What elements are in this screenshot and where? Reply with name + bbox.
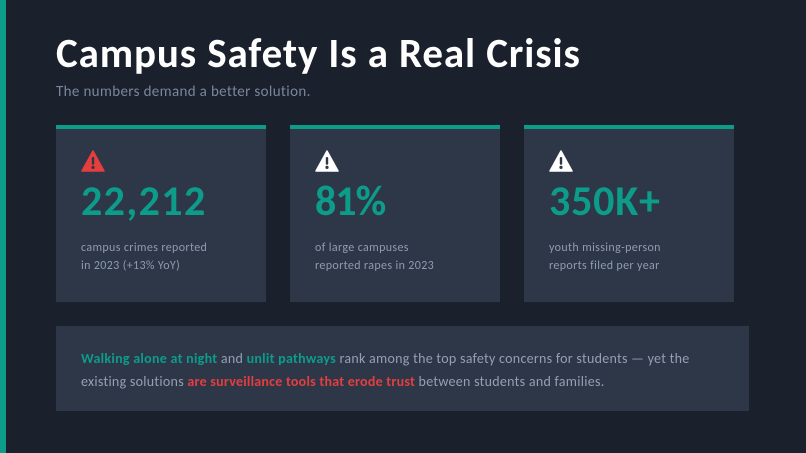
subtitle: The numbers demand a better solution. xyxy=(56,83,311,101)
description xyxy=(315,241,434,273)
description xyxy=(81,241,207,273)
accent bar xyxy=(0,0,6,453)
description: reported rapes in 2023 xyxy=(315,259,434,273)
icon: red warning triangle xyxy=(81,150,105,172)
stat: 81%: 81% xyxy=(315,176,385,227)
description: youth missing-person xyxy=(549,241,661,255)
panel: missing persons xyxy=(524,125,734,302)
callout text: Walking alone at night and unlit pathways rank among the top safety concerns for students — yet the xyxy=(81,350,689,367)
icon: white warning triangle xyxy=(315,150,339,172)
stat: 350K+: 350K+ xyxy=(549,176,661,227)
callout xyxy=(56,326,749,411)
description: reports filed per year xyxy=(549,259,660,273)
description: in 2023 (+13% YoY) xyxy=(81,259,180,273)
description: of large campuses xyxy=(315,241,409,255)
stat: 22,212: 22,212 xyxy=(81,176,207,227)
icon: white warning triangle xyxy=(549,150,573,172)
callout text: existing solutions are surveillance tools that erode trust between students and families. xyxy=(81,373,605,390)
panel: large campuses xyxy=(290,125,500,302)
title: Campus Safety Is a Real Crisis xyxy=(56,29,581,79)
panel: campus crimes xyxy=(56,125,266,302)
description: campus crimes reported xyxy=(81,241,207,255)
callout text xyxy=(81,350,689,390)
description xyxy=(549,241,661,273)
